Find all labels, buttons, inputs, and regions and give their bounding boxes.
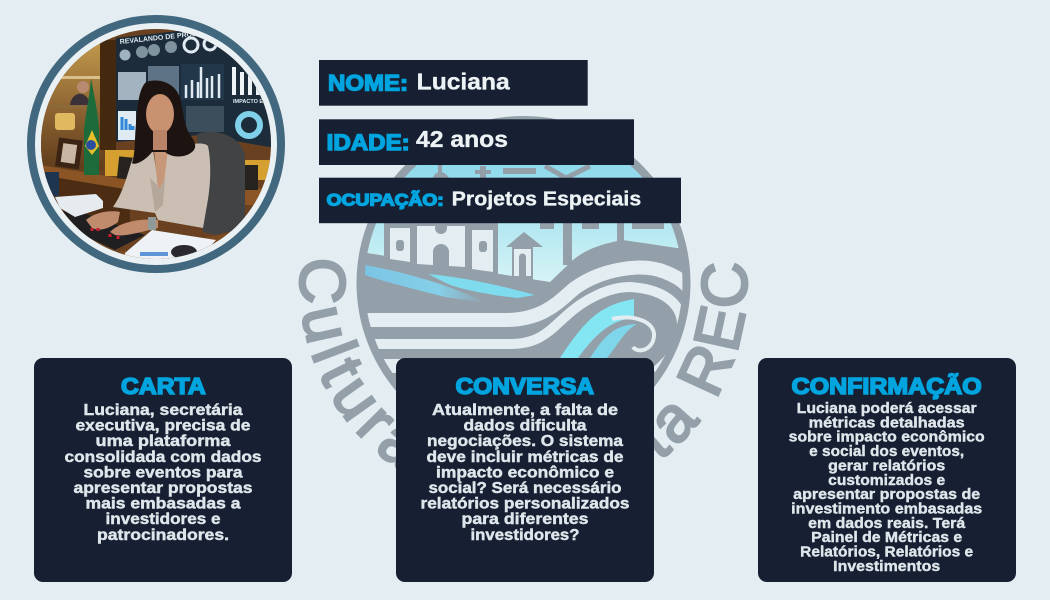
portrait photo with ring: IMPACTO E ECO	[233, 99, 277, 105]
occupation bar: OCUPAÇÃO:	[327, 190, 444, 210]
text block: conversa: relatórios personalizados	[420, 496, 630, 513]
logo watermark: Cultura	[298, 260, 396, 468]
text block: carta: Luciana, secretária	[84, 402, 243, 419]
text block: conversa: dados dificulta	[464, 418, 587, 435]
text block: conversa	[420, 402, 630, 544]
text block: carta: uma plataforma	[96, 433, 231, 450]
text block: confirmação: e social dos eventos,	[809, 443, 964, 460]
panel: confirmação	[758, 358, 1016, 582]
age bar	[319, 119, 634, 165]
text block: conversa: impacto econômico e	[436, 464, 614, 481]
text block: confirmação: métricas detalhadas	[809, 414, 965, 431]
text block: conversa: deve incluir métricas de	[426, 449, 624, 466]
text block: confirmação: Relatórios, Relatórios e	[800, 544, 973, 561]
age bar: IDADE:	[327, 130, 410, 155]
text block: conversa: social? Será necessário	[428, 480, 622, 497]
logo watermark: ta REC	[654, 262, 748, 458]
text block: confirmação: investimento embasadas	[791, 500, 982, 518]
panel: carta	[34, 358, 292, 582]
logo watermark	[298, 116, 748, 468]
text block: carta: apresentar propostas	[74, 480, 252, 497]
text block: confirmação	[789, 400, 985, 575]
text block: conversa: Atualmente, a falta de	[432, 402, 618, 419]
heading: carta: CARTA	[121, 373, 206, 399]
text block: conversa: investidores?	[470, 527, 580, 544]
age bar: 42 anos	[416, 126, 508, 152]
text block: conversa: para diferentes	[462, 511, 588, 528]
text block: confirmação: apresentar propostas de	[793, 486, 980, 503]
text block: carta: sobre eventos para	[84, 464, 243, 481]
heading: confirmação: CONFIRMAÇÃO	[792, 372, 982, 399]
portrait photo with ring: REVALANDO DE PROJE	[119, 31, 201, 46]
text block: conversa: negociações. O sistema	[427, 433, 623, 450]
name bar: Luciana	[417, 68, 510, 94]
text block: carta: executiva, precisa de	[76, 418, 251, 435]
text block: confirmação: sobre impacto econômico	[789, 429, 985, 446]
name bar	[319, 60, 588, 106]
name bar: NOME:	[328, 71, 408, 96]
text block: confirmação: Investimentos	[833, 558, 940, 575]
portrait photo with ring	[31, 19, 281, 269]
text block: confirmação: em dados reais. Terá	[808, 515, 966, 532]
heading: conversa: CONVERSA	[456, 373, 594, 399]
text block: confirmação: Luciana poderá acessar	[797, 400, 977, 417]
occupation bar	[319, 178, 681, 223]
text block: carta	[64, 402, 262, 544]
text block: carta: patrocinadores.	[97, 527, 229, 544]
text block: confirmação: Painel de Métricas e	[811, 529, 962, 546]
text block: confirmação: customizados e	[828, 472, 945, 489]
text block: carta: mais embasadas a	[86, 496, 241, 513]
text block: confirmação: gerar relatórios	[828, 457, 945, 474]
panel: conversa	[396, 358, 654, 582]
text block: carta: consolidada com dados	[64, 449, 262, 466]
text block: carta: investidores e	[106, 511, 221, 528]
occupation bar: Projetos Especiais	[452, 188, 641, 211]
